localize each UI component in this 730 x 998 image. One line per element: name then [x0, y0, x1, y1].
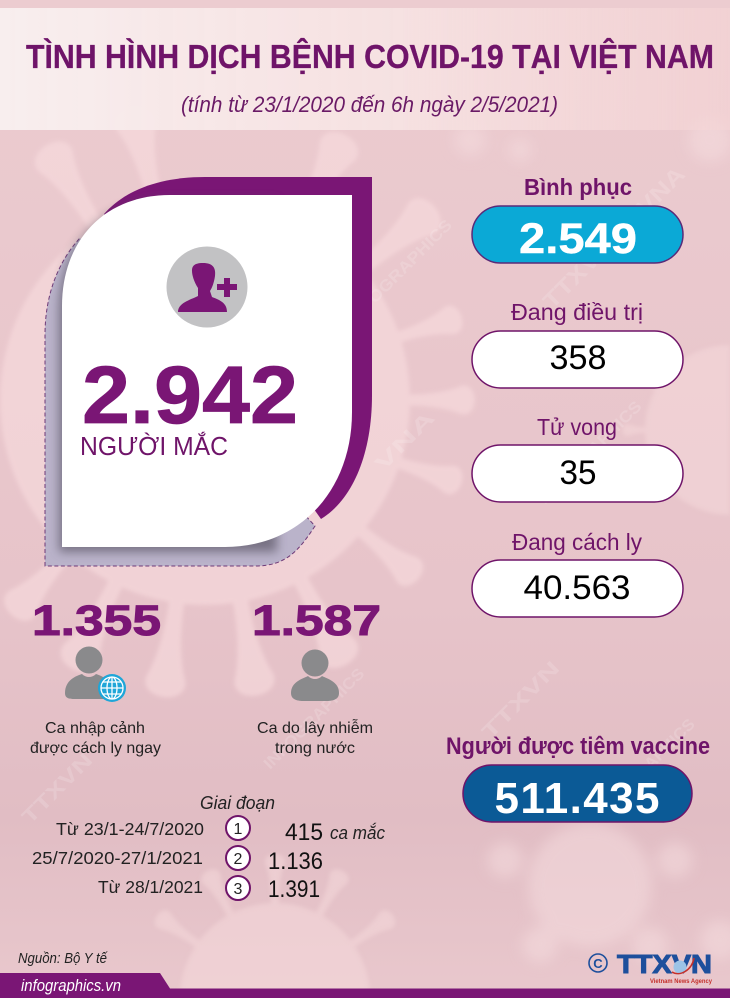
- phase table: [32, 793, 385, 903]
- panel: vaccinated: [446, 733, 710, 823]
- logo: TTXVN: TTXVN: [617, 949, 712, 979]
- watermarks: INFOGRAPHICS: [536, 398, 646, 508]
- label: Bình phục: [524, 174, 632, 200]
- panel: total cases leaf card: [45, 177, 372, 566]
- footer bar: [0, 973, 730, 998]
- imported cases: [30, 597, 161, 757]
- panel: under treatment: [472, 299, 683, 388]
- panel: under treatment: 358: [550, 339, 606, 377]
- watermarks: [18, 161, 699, 829]
- panel: quarantine: 40.563: [524, 569, 630, 607]
- phase 1: ca mắc: [330, 823, 385, 843]
- phase 2: 25/7/2020-27/1/2021: [32, 848, 203, 868]
- total label: NGƯỜI MẮC: [80, 431, 228, 461]
- panel: deaths: [472, 414, 683, 502]
- watermarks: INFOGRAPHICS: [261, 665, 369, 773]
- watermarks: INFOGRAPHICS: [595, 716, 699, 820]
- caption: Ca nhập cảnh: [45, 720, 145, 737]
- number: 1.587: [252, 597, 381, 645]
- phase heading: Giai đoạn: [200, 793, 275, 813]
- total number: 2.942: [82, 350, 298, 441]
- logo: TTXVN: Vietnam News Agency: [650, 978, 712, 985]
- phase 3: 1.391: [268, 876, 320, 903]
- phase 2: [32, 846, 323, 875]
- panel: quarantine: Đang cách ly: [512, 529, 642, 555]
- phase 1: 415: [285, 819, 323, 846]
- phase 2: 1.136: [268, 848, 323, 875]
- panel: quarantine: [472, 529, 683, 617]
- logo: TTXVN: [589, 949, 712, 985]
- icon: person with globe: [65, 646, 126, 702]
- panel: deaths: Tử vong: [537, 414, 617, 440]
- phase 2: 2: [234, 851, 243, 868]
- watermarks: INFOGRAPHICS: [345, 217, 456, 328]
- domestic cases: [252, 597, 381, 757]
- panel: recovered: 2.549: [519, 215, 637, 263]
- watermarks: TTXVN: [18, 749, 97, 829]
- icon: person: [291, 650, 339, 701]
- watermarks: TTXVN — VNA: [538, 161, 690, 314]
- panel: under treatment: Đang điều trị: [511, 299, 643, 325]
- panel: deaths: 35: [560, 454, 596, 492]
- website: infographics.vn: [21, 976, 121, 995]
- phase 1: 1: [234, 821, 243, 838]
- inner shadow: [59, 200, 277, 552]
- watermarks: TTXVN: [478, 657, 564, 744]
- caption: Ca do lây nhiễm: [257, 718, 373, 737]
- header band: [0, 8, 730, 130]
- phase 3: Từ 28/1/2021: [98, 877, 203, 897]
- logo: TTXVN: C: [593, 956, 603, 971]
- caption: được cách ly ngay: [30, 740, 161, 757]
- phase 1: [56, 816, 385, 846]
- watermarks: VNA: [371, 407, 440, 476]
- panel: recovered: [472, 174, 683, 263]
- phase 3: 3: [234, 881, 243, 898]
- panel: vaccinated: 511.435: [494, 774, 660, 823]
- number: 1.355: [32, 597, 161, 645]
- icon: person plus: [166, 246, 248, 328]
- subtitle: (tính từ 23/1/2020 đến 6h ngày 2/5/2021): [181, 92, 558, 117]
- purple back shape: [104, 177, 372, 519]
- caption: trong nước: [275, 740, 355, 757]
- phase 3: [98, 876, 320, 903]
- source: Nguồn: Bộ Y tế: [18, 951, 108, 967]
- white card: [62, 195, 352, 547]
- phase 1: Từ 23/1-24/7/2020: [56, 819, 204, 839]
- shadow layer with dashed outline: [45, 238, 315, 566]
